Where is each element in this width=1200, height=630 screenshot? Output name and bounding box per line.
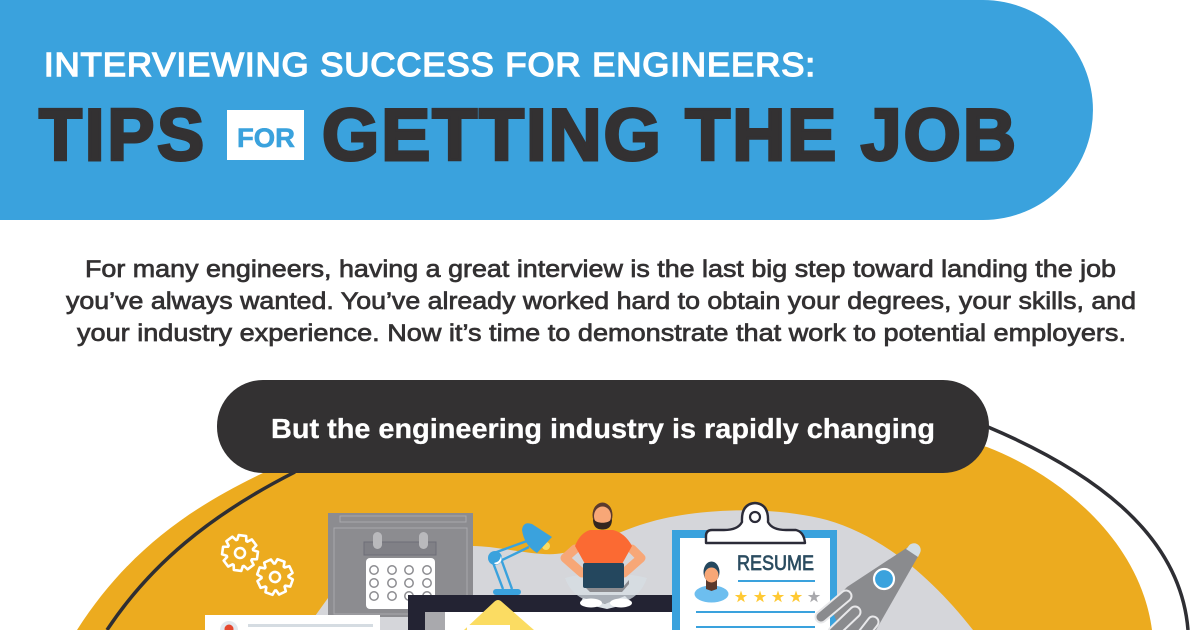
connector curve right — [988, 427, 1188, 630]
header banner — [0, 0, 1093, 220]
intro paragraph: your industry experience. Now it’s time to demonstrate that work to potential employers. — [77, 320, 1126, 347]
clipboard — [672, 503, 837, 630]
robotic hand — [821, 543, 921, 630]
clipboard clip — [706, 503, 805, 543]
browser window with calendar — [328, 513, 473, 617]
yellow background shape — [77, 422, 1152, 630]
resume avatar — [694, 562, 728, 602]
star rating — [735, 590, 820, 602]
resume heading: RESUME — [737, 552, 814, 575]
for badge: FOR — [237, 123, 295, 153]
white card with pin — [205, 615, 380, 630]
intro paragraph — [66, 256, 1136, 347]
icon: desk lamp — [488, 523, 552, 595]
grey background shape — [305, 510, 973, 630]
for badge — [227, 110, 304, 160]
envelope icon — [464, 600, 534, 630]
icon: gears — [220, 533, 298, 600]
computer monitor — [408, 595, 673, 630]
intro paragraph: For many engineers, having a great interview is the last big step toward landing the job — [85, 256, 1116, 283]
callout pill — [217, 380, 989, 473]
resume divider lines — [696, 580, 815, 628]
person with laptop — [565, 502, 647, 609]
title: tips: TIPS — [39, 95, 207, 176]
callout pill: But the engineering industry is rapidly changing — [271, 413, 935, 444]
subtitle: INTERVIEWING SUCCESS FOR ENGINEERS: — [44, 46, 816, 83]
title: getting the job: GETTING THE JOB — [322, 95, 1018, 176]
intro paragraph: you’ve always wanted. You’ve already worked hard to obtain your degrees, your skills, and — [66, 288, 1136, 315]
connector curve left — [107, 472, 295, 630]
